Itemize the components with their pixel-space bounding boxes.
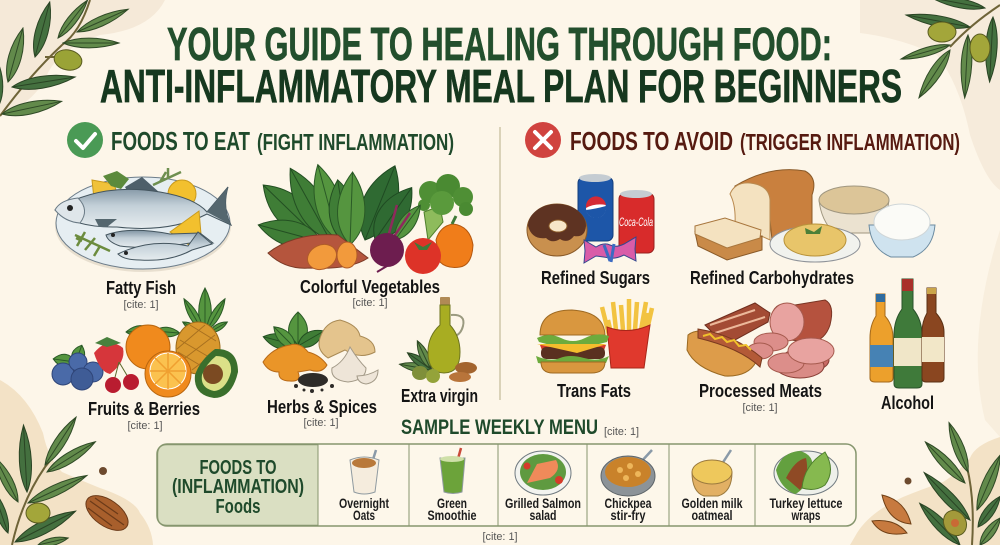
item: herbs and spices <box>261 312 378 429</box>
heading: foods to eat: FOODS TO EAT <box>111 126 250 156</box>
heading: foods to eat: (FIGHT INFLAMMATION) <box>257 129 454 155</box>
heading: foods to eat <box>67 122 454 158</box>
item: fatty fish: Fatty Fish <box>106 278 176 298</box>
menu item: turkey lettuce wraps <box>770 451 843 523</box>
menu item: golden milk oatmeal <box>682 450 743 523</box>
heading: sample weekly menu: SAMPLE WEEKLY MENU <box>401 416 598 439</box>
heading: sample weekly menu: [cite: 1] <box>604 426 639 438</box>
menu item: green smoothie <box>428 448 477 523</box>
item: refined sugars <box>527 174 654 288</box>
item: fatty fish: [cite: 1] <box>124 299 158 311</box>
olive branch: bottom left <box>0 414 98 545</box>
heading: foods to avoid <box>525 122 960 158</box>
item: refined carbohydrates <box>690 170 935 288</box>
item: fruits and berries <box>52 288 238 432</box>
item: extra virgin: Extra virgin <box>401 386 478 406</box>
menu item: turkey lettuce wraps: wraps <box>791 508 820 523</box>
menu item: chickpea stir-fry: stir-fry <box>610 508 646 523</box>
olive branch: top right <box>900 0 1000 101</box>
heading: foods to avoid: FOODS TO AVOID <box>570 126 733 156</box>
icon: salmon salad <box>515 451 571 495</box>
icon: burger and fries <box>536 299 652 373</box>
icon: pecan <box>80 467 134 537</box>
item: fruits and berries: Fruits & Berries <box>88 399 200 419</box>
item: fruits and berries: [cite: 1] <box>128 420 162 432</box>
icon: olive oil <box>399 297 477 383</box>
item: fatty fish <box>55 168 231 311</box>
menu item: green smoothie: Smoothie <box>428 508 477 523</box>
item: colorful vegetables <box>253 160 473 309</box>
divider <box>499 127 501 400</box>
item: processed meats: Processed Meats <box>699 381 822 401</box>
icon: sweets and soda: Coca-Cola <box>619 215 653 229</box>
menu item: overnight oats <box>339 450 389 523</box>
table header cell: Foods <box>216 496 260 518</box>
icon: lettuce wraps <box>774 451 838 495</box>
icon: bread, rice, pasta <box>695 170 935 262</box>
icon: bottles <box>870 279 944 388</box>
menu item: chickpea stir-fry: Chickpea <box>604 496 652 511</box>
icon: almonds <box>872 478 912 534</box>
icon: herbs and spices <box>261 312 378 393</box>
item: alcohol: Alcohol <box>881 393 934 413</box>
icon: vegetables <box>253 160 473 274</box>
menu item: chickpea stir-fry <box>601 450 655 523</box>
icon: oats <box>350 450 379 494</box>
item: processed meats <box>687 300 834 414</box>
menu item: overnight oats: Overnight <box>339 496 389 511</box>
icon: cross <box>525 122 561 158</box>
menu item: golden milk oatmeal: oatmeal <box>692 508 732 523</box>
item: herbs and spices: Herbs & Spices <box>267 397 377 417</box>
table header cell <box>158 445 318 525</box>
item: refined sugars: Refined Sugars <box>541 268 650 288</box>
icon: fruits <box>52 288 238 398</box>
menu item: turkey lettuce wraps: Turkey lettuce <box>770 496 843 511</box>
item: refined carbohydrates: Refined Carbohydrates <box>690 268 854 288</box>
item: trans fats <box>536 299 652 401</box>
menu item: overnight oats: Oats <box>353 508 375 523</box>
icon: chickpea bowl <box>601 450 655 496</box>
icon: hot dog, bacon, salami <box>687 300 834 378</box>
item: trans fats: Trans Fats <box>557 381 631 401</box>
menu item: grilled salmon salad <box>505 451 581 523</box>
menu item: grilled salmon salad: salad <box>530 508 556 523</box>
menu item: golden milk oatmeal: Golden milk <box>682 496 743 511</box>
olive branch: bottom right <box>916 421 1000 545</box>
item: alcohol <box>870 279 944 413</box>
menu item: green smoothie: Green <box>437 496 467 511</box>
item: colorful vegetables: Colorful Vegetables <box>300 277 440 297</box>
icon: fish plate <box>55 168 231 272</box>
item: colorful vegetables: [cite: 1] <box>352 297 388 309</box>
table header cell: (INFLAMMATION) <box>172 476 304 498</box>
item: processed meats: [cite: 1] <box>742 402 778 414</box>
icon: golden oatmeal bowl <box>692 450 732 496</box>
olive branch: top left <box>0 0 130 120</box>
title <box>100 18 902 112</box>
icon: check <box>67 122 103 158</box>
panel: weekly menu table <box>157 444 856 526</box>
menu item: grilled salmon salad: Grilled Salmon <box>505 496 581 511</box>
icon: smoothie <box>440 448 465 494</box>
item: extra virgin <box>399 297 478 406</box>
table header cell: FOODS TO <box>200 457 276 479</box>
citation: [cite: 1] <box>482 531 518 543</box>
item: herbs and spices: [cite: 1] <box>304 417 338 429</box>
